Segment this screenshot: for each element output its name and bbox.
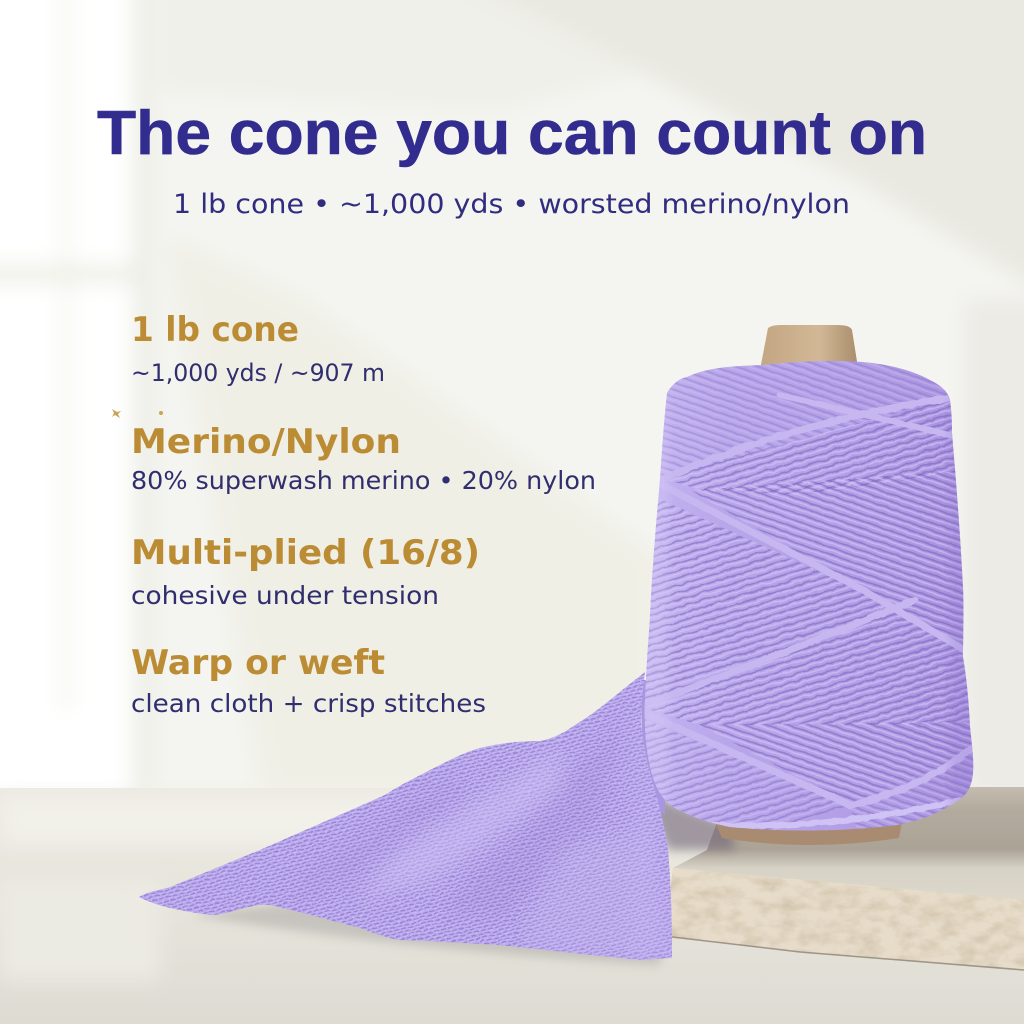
yarn cone xyxy=(635,325,985,850)
spec: Multi-plied xyxy=(131,533,480,610)
spec: Warp or weft: clean cloth + crisp stitches xyxy=(131,689,486,718)
spec: Warp or weft: Warp or weft xyxy=(131,643,385,683)
spec: Merino/Nylon xyxy=(131,422,596,495)
spec: Merino/Nylon: 80% superwash merino • 20% nylon xyxy=(131,466,596,495)
contact shadow under cone xyxy=(640,790,735,850)
sparkle flecks xyxy=(112,409,163,418)
background wall and window light xyxy=(0,0,1024,800)
cone edge shading xyxy=(644,394,670,802)
cardboard core bottom xyxy=(715,822,902,845)
table surface xyxy=(0,788,1024,1024)
spec: 1 lb cone: ~1,000 yds / ~907 m xyxy=(131,359,385,387)
winding bands xyxy=(642,395,976,826)
yarn body xyxy=(645,361,973,831)
cloth shadow xyxy=(190,900,665,965)
fold shading xyxy=(366,752,672,960)
subtitle: 1 lb cone • ~1,000 yds • worsted merino/nylon xyxy=(173,189,850,220)
woven cloth xyxy=(130,660,680,970)
spec: Merino/Nylon: Merino/Nylon xyxy=(131,422,401,462)
spec list xyxy=(131,310,596,718)
spec: Multi-plied: Multi-plied (16/8) xyxy=(131,533,480,573)
spec: 1 lb cone: 1 lb cone xyxy=(131,310,299,350)
cardboard core top xyxy=(760,325,858,370)
cloth behind cone xyxy=(640,680,665,815)
stone slab xyxy=(670,787,1024,970)
title: The cone you can count on xyxy=(97,99,927,168)
winding texture xyxy=(644,361,974,830)
spec: Multi-plied: cohesive under tension xyxy=(131,581,439,610)
spec: Warp or weft xyxy=(131,643,486,718)
spec: 1 lb cone xyxy=(131,310,385,387)
